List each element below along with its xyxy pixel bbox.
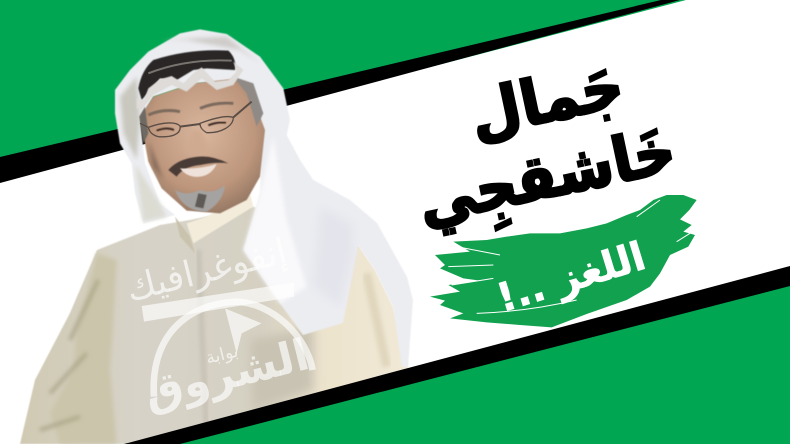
title line two: خَاشقجِي — [411, 114, 683, 246]
face — [139, 77, 265, 213]
glasses — [140, 102, 252, 137]
brush stroke — [430, 195, 697, 327]
smile — [180, 164, 217, 177]
title calligraphy — [411, 50, 683, 246]
brush text: اللغز ..! — [492, 233, 651, 322]
watermark title: إنفوغرافيك — [122, 231, 291, 310]
nose shading — [185, 130, 210, 155]
watermark site name: بوابة — [204, 341, 240, 369]
black igal — [138, 50, 235, 100]
moustache — [168, 156, 228, 177]
watermark bar — [142, 283, 294, 322]
watermark pointer — [225, 308, 262, 353]
bottom green corner — [180, 286, 790, 444]
title line one: جَمال — [463, 50, 630, 152]
bottom black stripe — [124, 266, 790, 444]
eyebrows — [148, 103, 233, 115]
scarf and headdress — [115, 29, 413, 367]
watermark — [122, 231, 314, 419]
watermark arc — [154, 302, 313, 397]
watermark brand: الشروق — [139, 330, 314, 419]
top black stripe — [0, 0, 680, 183]
robe — [20, 193, 408, 444]
person portrait — [20, 29, 413, 444]
goatee — [175, 185, 225, 212]
headdress fold — [137, 62, 243, 110]
eyes — [157, 122, 226, 131]
